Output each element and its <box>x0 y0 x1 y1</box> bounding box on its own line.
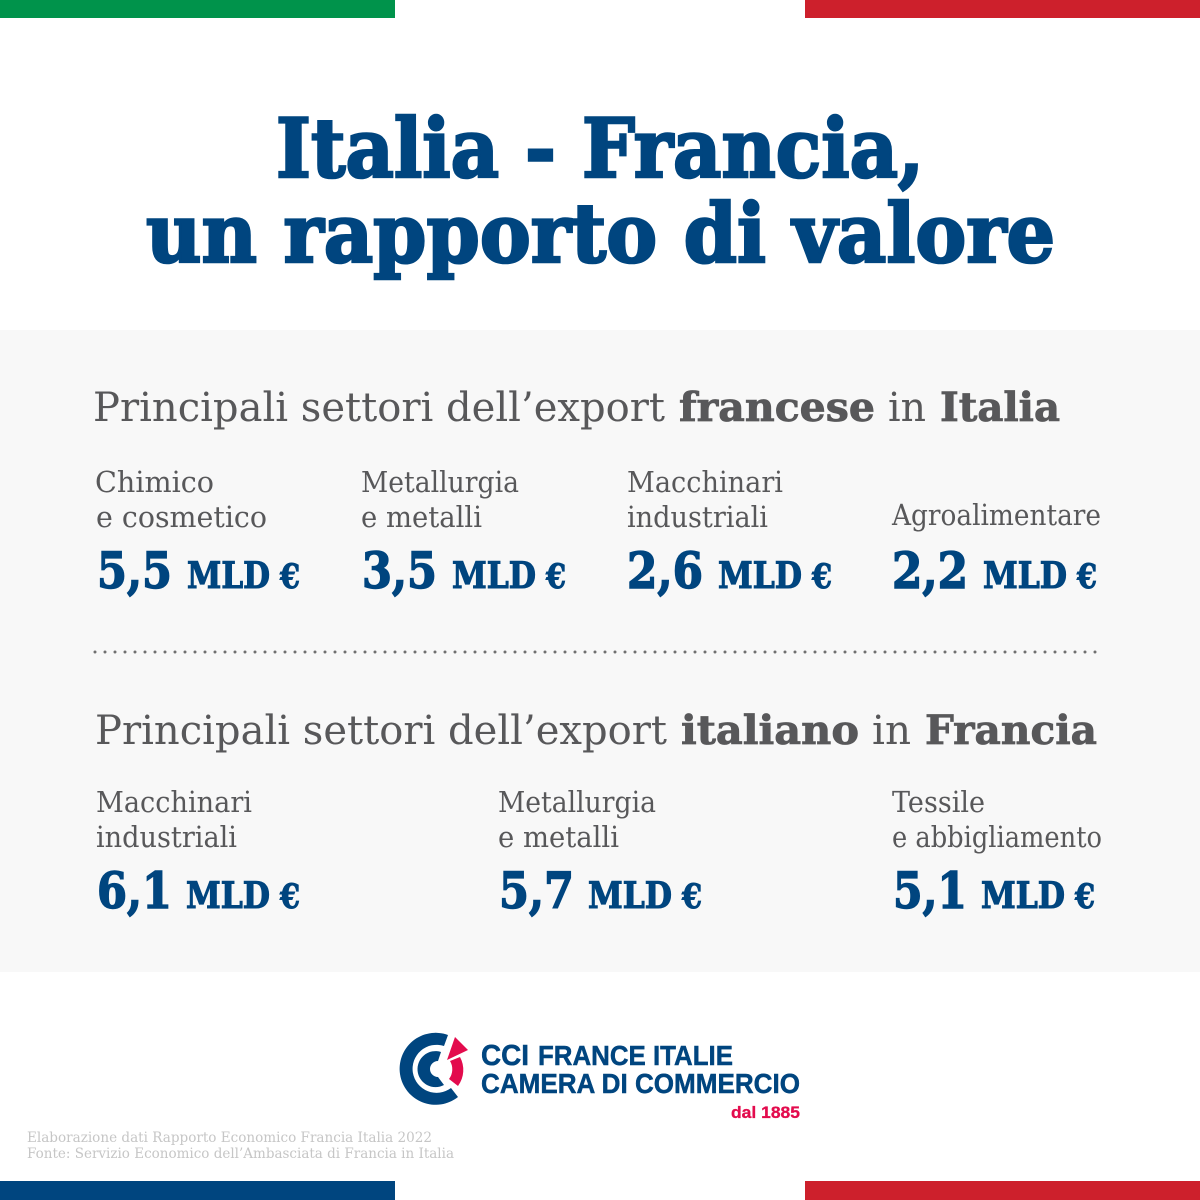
stat: Metallurgia e metalli (France): MLD <box>452 555 536 597</box>
stat: Agroalimentare: 2,2 <box>892 541 968 600</box>
stat: Metallurgia e metalli (France): € <box>545 557 566 597</box>
stat: Macchinari industriali (Italy): industriali <box>96 820 237 854</box>
stat: Chimico e cosmetico: € <box>279 557 300 597</box>
stat: Macchinari industriali (Italy) <box>96 785 300 920</box>
logo wordmark: dal 1885 <box>731 1103 800 1122</box>
stat: Chimico e cosmetico <box>95 465 300 600</box>
stat: Chimico e cosmetico: e cosmetico <box>96 500 267 534</box>
stat: Agroalimentare: Agroalimentare <box>891 498 1101 532</box>
stat: Metallurgia e metalli (Italy) <box>498 785 702 920</box>
stat: Macchinari industriali (France) <box>627 465 832 600</box>
stat: Chimico e cosmetico: 5,5 <box>97 541 172 600</box>
source note: Elaborazione dati Rapporto Economico Francia Italia 2022 <box>27 1130 432 1146</box>
logo wordmark <box>481 1040 800 1122</box>
stat: Macchinari industriali (France): MLD <box>718 555 802 597</box>
stat: Macchinari industriali (Italy): € <box>279 877 300 917</box>
title: Italia - Francia, <box>276 102 924 197</box>
heading: French export: francese <box>679 384 875 431</box>
stat: Metallurgia e metalli (France): 3,5 <box>362 541 437 600</box>
stat: Tessile e abbigliamento <box>892 785 1102 920</box>
stat: Macchinari industriali (Italy): Macchinari <box>96 785 252 819</box>
stat: Macchinari industriali (Italy): MLD <box>186 875 270 917</box>
heading: Italian export: Principali settori dell’export <box>95 708 667 754</box>
stat: Macchinari industriali (France): Macchinari <box>627 465 783 499</box>
stat: Metallurgia e metalli (Italy): Metallurgia <box>498 785 656 819</box>
stat: Macchinari industriali (France): 2,6 <box>627 541 703 600</box>
stat: Macchinari industriali (Italy): 6,1 <box>97 861 172 920</box>
stat: Chimico e cosmetico: Chimico <box>95 465 214 499</box>
stat: Metallurgia e metalli (France): e metalli <box>361 500 482 534</box>
heading: French export: in <box>888 385 926 431</box>
logo wordmark: CAMERA DI COMMERCIO <box>481 1068 800 1099</box>
stat: Agroalimentare: € <box>1076 557 1097 597</box>
heading: Italian export: in <box>872 708 911 754</box>
title <box>146 102 1055 282</box>
stat: Agroalimentare <box>891 498 1101 600</box>
heading: French export: Principali settori dell’export <box>93 385 665 431</box>
stat: Chimico e cosmetico: MLD <box>187 555 270 597</box>
title: un rapporto di valore <box>146 187 1055 282</box>
icon: CCI emblem <box>400 1033 468 1105</box>
logo wordmark: FRANCE ITALIE <box>538 1040 733 1071</box>
stat: Tessile e abbigliamento: € <box>1074 877 1095 917</box>
stat: Agroalimentare: MLD <box>983 555 1067 597</box>
stat: Tessile e abbigliamento: 5,1 <box>893 861 967 920</box>
stat: Tessile e abbigliamento: Tessile <box>892 785 985 819</box>
stat: Tessile e abbigliamento: e abbigliamento <box>892 820 1102 854</box>
heading: Italian export <box>95 707 1097 754</box>
top flag bars <box>0 0 1200 18</box>
heading: French export <box>93 384 1060 431</box>
stat: Metallurgia e metalli (Italy): MLD <box>588 875 672 917</box>
stat: Metallurgia e metalli (Italy): e metalli <box>498 820 619 854</box>
heading: Italian export: italiano <box>681 707 859 754</box>
stat: Macchinari industriali (France): € <box>811 557 832 597</box>
source note <box>27 1130 454 1162</box>
source note: Fonte: Servizio Economico dell’Ambasciata di Francia in Italia <box>27 1146 454 1162</box>
heading: French export: Italia <box>940 384 1060 431</box>
heading: Italian export: Francia <box>925 707 1097 754</box>
bottom flag bars <box>0 1181 1200 1200</box>
stat: Metallurgia e metalli (Italy): 5,7 <box>499 861 574 920</box>
stat: Metallurgia e metalli (France) <box>361 465 566 600</box>
stat: Tessile e abbigliamento: MLD <box>981 875 1065 917</box>
stat: Macchinari industriali (France): industriali <box>627 500 768 534</box>
stat: Metallurgia e metalli (France): Metallurgia <box>361 465 519 499</box>
stat: Metallurgia e metalli (Italy): € <box>681 877 702 917</box>
logo wordmark: CCI <box>481 1040 529 1072</box>
panel: export sectors <box>0 330 1200 972</box>
logo: CCI France Italie <box>400 1033 800 1122</box>
